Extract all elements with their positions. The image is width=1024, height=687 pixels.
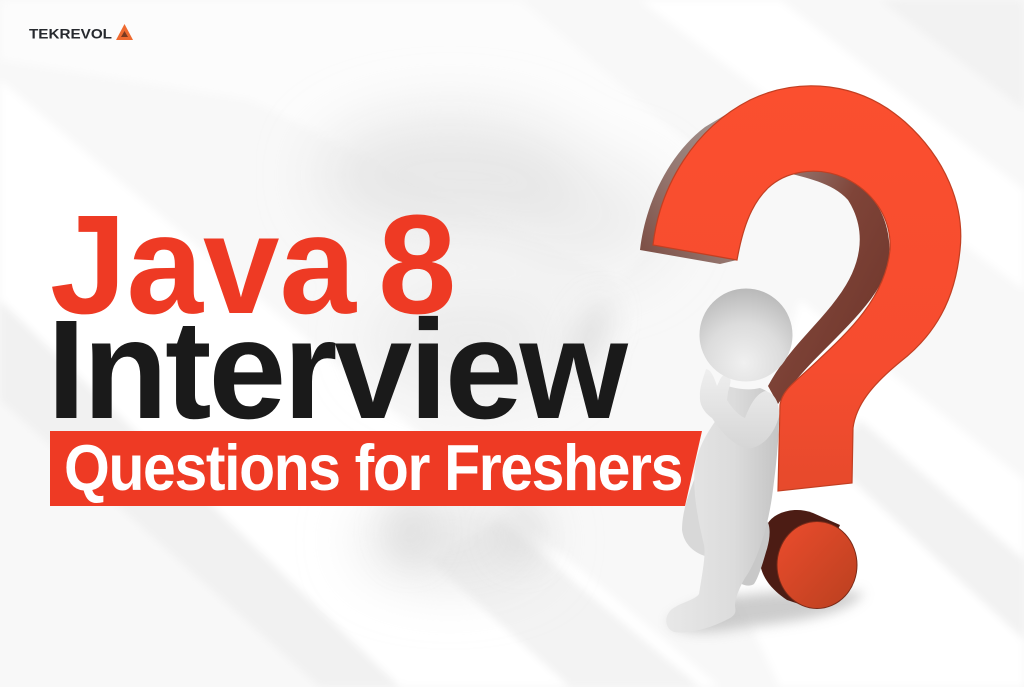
figure body and leg	[666, 386, 779, 633]
logo wordmark: TEKREVOL	[29, 26, 112, 42]
question mark face	[653, 86, 961, 491]
question mark dot	[760, 510, 857, 608]
thinking figure	[666, 288, 792, 633]
title: Java 8: 8	[378, 185, 456, 343]
question mark	[640, 86, 961, 609]
figure back leg	[736, 518, 770, 586]
subtitle banner	[50, 431, 702, 506]
illustration: question mark with thinking figure	[640, 86, 961, 633]
ground shadow	[668, 591, 864, 632]
logo triangle icon	[116, 24, 133, 40]
figure head	[700, 288, 792, 382]
title: Interview: Interview	[47, 290, 628, 448]
logo: TekRevol	[29, 24, 133, 42]
title: Java 8: Java	[50, 185, 358, 343]
figure arm and hand	[700, 369, 779, 448]
banner background	[50, 431, 702, 506]
question mark extruded side	[640, 100, 750, 264]
banner text: Questions for Freshers	[64, 431, 682, 504]
figure raised knee	[682, 470, 722, 556]
